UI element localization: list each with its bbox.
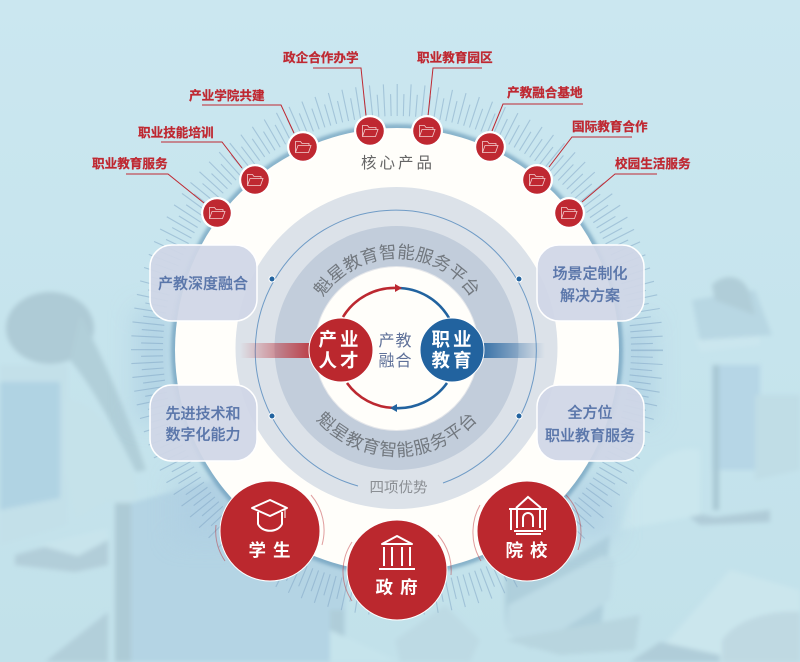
radial tick marks [147,100,647,600]
panel: advantage box, custom solutions [537,245,644,321]
product: international cooperation [521,119,648,196]
connector bar: red [240,343,310,358]
product: education park: 职业教育园区 [417,50,493,65]
stakeholder: government: 政府 [376,578,424,598]
icon: graduation cap [252,500,287,531]
node: vocational education: 职业 [431,329,475,350]
product: campus life services [553,156,691,229]
stakeholder: students: 学生 [248,540,298,560]
panel: advantage box, deep integration [150,245,257,321]
main white disc [175,128,619,572]
product: integration base: 产教融合基地 [507,85,583,100]
panel: advantage box, technology [150,385,257,461]
panel: platform rings [236,187,558,509]
curved heading: bottom platform name: 魁星教育智能服务平台 [316,411,476,458]
product: government-enterprise schooling: 政企合作办学 [283,50,359,65]
node: vocational education [420,318,484,382]
node: industry talent: 人才 [318,350,362,371]
icon: college building [509,497,547,534]
outer ring shadow [171,124,623,576]
product: industry college: 产业学院共建 [189,88,265,103]
cycle arrows [343,284,449,412]
center text: integration [378,332,413,370]
product: international cooperation: 国际教育合作 [572,119,648,134]
product: integration base [474,85,583,163]
panel: advantage box, full-range services [537,385,644,461]
icon: government building [379,536,415,569]
heading: core products: 核心产品 [361,154,435,172]
stakeholder: government [343,520,451,620]
node: industry talent [309,318,373,382]
panel: advantage box, custom solutions: 解决方案 [560,286,620,304]
stakeholder: students [216,481,324,581]
node: industry talent: 产业 [318,329,362,350]
stakeholder: colleges [473,481,581,581]
panel: advantage box, deep integration: 产教深度融合 [158,276,248,292]
panel: advantage box, full-range services: 职业教育服务 [545,426,635,444]
panel: advantage box, custom solutions: 场景定制化 [552,264,628,282]
heading: four advantages: 四项优势 [370,480,428,496]
product: government-enterprise schooling [283,50,386,147]
stakeholder: colleges: 院校 [506,540,554,560]
panel: advantage box, technology: 数字化能力 [165,426,241,444]
product: vocational education services: 职业教育服务 [92,156,168,171]
product: vocational education services [92,156,233,229]
product: industry college [189,88,319,163]
curved heading: top platform name: 魁星教育智能服务平台 [313,243,478,297]
product: education park [411,50,493,147]
center text: integration: 产教 [378,332,413,350]
connector bar: blue [483,343,545,358]
product: skills training [138,125,271,196]
panel: advantage box, full-range services: 全方位 [567,404,613,422]
node: vocational education: 教育 [431,350,475,371]
center text: integration: 融合 [378,352,413,370]
panel: advantage box, technology: 先进技术和 [165,406,241,422]
product: campus life services: 校园生活服务 [615,156,691,171]
product: skills training: 职业技能培训 [138,125,214,140]
